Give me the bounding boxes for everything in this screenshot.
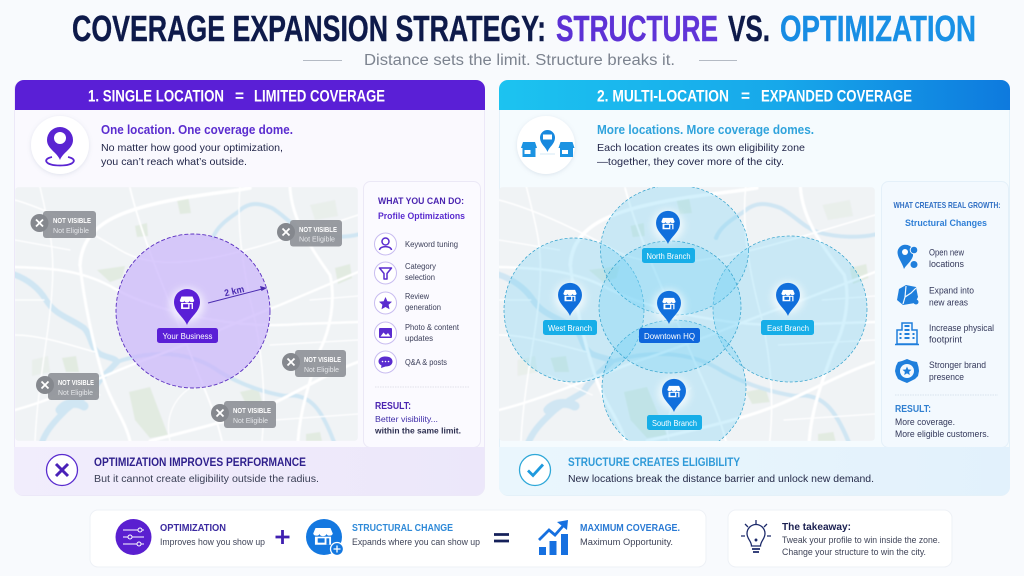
item: review generation: Review	[405, 292, 429, 301]
intro text: multi location: More locations. More coverage domes.	[597, 123, 814, 137]
badge: not visible	[282, 350, 346, 377]
badge: not visible	[277, 220, 342, 246]
intro text: single location: One location. One coverage dome.	[101, 123, 293, 137]
item: open new locations: locations	[929, 259, 964, 269]
title: STRUCTURE	[556, 8, 718, 49]
item: review generation	[374, 292, 441, 314]
item: stronger brand presence: Stronger brand	[929, 360, 986, 370]
result text: more coverage: More eligible customers.	[895, 429, 989, 439]
item: photo and content updates	[374, 322, 460, 344]
item: keyword tuning: Keyword tuning	[405, 240, 458, 249]
badge: not visible: Not Eligible	[299, 234, 335, 244]
intro text: single location: No matter how good your optimization,	[101, 142, 283, 154]
item: category selection: Category	[405, 262, 436, 271]
intro text: multi location: Each location creates its own eligibility zone	[597, 142, 805, 154]
pin: north branch: North Branch	[646, 251, 691, 261]
pin: east branch: East Branch	[767, 323, 809, 333]
dome: downtown	[599, 241, 741, 373]
takeaway box	[728, 510, 952, 567]
item: increase physical footprint: footprint	[929, 334, 962, 344]
pin: south branch: South Branch	[652, 418, 697, 428]
pin: east branch	[761, 282, 814, 335]
icon: growth chart	[539, 520, 568, 555]
callout: optimization improves performance	[14, 447, 484, 495]
intro text: single location	[101, 123, 293, 168]
sidebar: what you can do: WHAT YOU CAN DO:	[378, 196, 464, 207]
item: review generation: generation	[405, 303, 441, 312]
icon: three stores	[517, 116, 575, 174]
badge: not visible: NOT VISIBLE	[299, 225, 337, 234]
term: optimization: Improves how you show up	[160, 537, 265, 547]
intro text: multi location	[597, 123, 814, 168]
pin: north branch	[642, 210, 695, 263]
badge: not visible: Not Eligible	[304, 365, 339, 374]
callout: structure creates eligibility: STRUCTURE CREATES ELIGIBILITY	[568, 457, 740, 469]
panel: multi location	[497, 80, 1010, 496]
icon: location pin	[31, 116, 89, 174]
term: maximum coverage: MAXIMUM COVERAGE.	[580, 522, 680, 534]
map: multiple coverage domes	[497, 185, 877, 456]
sidebar: what creates real growth	[882, 182, 1008, 448]
result text: more coverage: RESULT:	[895, 404, 931, 415]
item: category selection	[374, 262, 436, 284]
term: optimization: OPTIMIZATION	[160, 522, 226, 534]
term: optimization	[160, 522, 265, 547]
result text: more coverage: More coverage.	[895, 417, 955, 427]
panel: single location	[13, 80, 485, 496]
callout: structure creates eligibility: New locations break the distance barrier and unlock new demand.	[568, 473, 874, 485]
badge: not visible: Not Eligible	[53, 226, 89, 235]
item: q and a posts	[374, 351, 447, 373]
radius arrow: 2 km: 2 km	[223, 284, 245, 299]
item: increase physical footprint: Increase physical	[929, 323, 994, 333]
plus sign	[276, 530, 290, 544]
pin: south branch	[647, 378, 702, 430]
pin: west branch: West Branch	[548, 323, 592, 333]
panel header: multi location: 2. MULTI-LOCATION	[597, 86, 729, 106]
panel header: multi location: EXPANDED COVERAGE	[761, 86, 912, 106]
subtitle: Distance sets the limit. Structure breaks it.	[364, 52, 675, 69]
title: COVERAGE EXPANSION STRATEGY:	[72, 8, 546, 49]
badge: not visible: NOT VISIBLE	[58, 378, 94, 387]
badge: not visible: NOT VISIBLE	[304, 355, 341, 364]
result text: same limit: RESULT:	[375, 401, 411, 412]
takeaway text	[782, 521, 940, 557]
result text: same limit	[374, 401, 461, 436]
item: category selection: selection	[405, 273, 435, 282]
panel header: single location: 1. SINGLE LOCATION	[88, 86, 224, 106]
term: maximum coverage	[580, 522, 680, 547]
dome: north branch	[600, 185, 748, 315]
item: stronger brand presence: presence	[929, 372, 964, 382]
item: photo and content updates: updates	[405, 334, 433, 343]
icon: sliders	[116, 519, 152, 555]
panel header: multi location: =	[741, 86, 750, 106]
result text: same limit: Better visibility...	[375, 414, 438, 424]
item: expand into new areas: Expand into	[929, 286, 974, 296]
pin: your business: Your Business	[162, 331, 212, 341]
dome: west branch	[504, 238, 644, 382]
result text: more coverage	[895, 404, 989, 439]
result text: same limit: within the same limit.	[374, 426, 461, 436]
panel header: single location: =	[235, 86, 244, 106]
term: structural change: Expands where you can show up	[352, 537, 480, 547]
term: structural change: STRUCTURAL CHANGE	[352, 522, 453, 534]
item: expand into new areas	[897, 285, 974, 308]
callout: optimization improves performance: But it cannot create eligibility outside the radius.	[94, 473, 319, 485]
item: increase physical footprint	[895, 323, 994, 344]
item: q and a posts: Q&A & posts	[405, 358, 447, 367]
icon: store with plus	[306, 519, 344, 556]
coverage dome	[116, 234, 270, 388]
intro text: multi location: —together, they cover more of the city.	[597, 156, 784, 168]
badge: not visible	[36, 373, 99, 400]
radius arrow: 2 km	[208, 284, 267, 303]
term: structural change	[352, 522, 480, 547]
item: keyword tuning	[374, 233, 458, 255]
title: VS.	[728, 8, 770, 49]
map: single coverage dome	[13, 187, 360, 442]
badge: not visible	[211, 401, 276, 428]
callout: structure creates eligibility	[499, 447, 1010, 495]
panel header: multi location	[499, 80, 1010, 110]
sidebar: what you can do	[364, 182, 480, 448]
icon: light bulb	[741, 520, 771, 552]
item: photo and content updates: Photo & content	[405, 323, 460, 332]
summary equation box	[90, 510, 706, 567]
sidebar: what creates real growth: Structural Changes	[905, 218, 987, 229]
item: open new locations: Open new	[929, 248, 964, 258]
panel header: single location	[15, 80, 485, 110]
item: expand into new areas: new areas	[929, 298, 968, 308]
badge: not visible: NOT VISIBLE	[53, 216, 91, 225]
badge: not visible	[30, 211, 96, 238]
takeaway text: Change your structure to win the city.	[782, 547, 926, 557]
callout: optimization improves performance: OPTIMIZATION IMPROVES PERFORMANCE	[94, 457, 306, 469]
item: stronger brand presence	[895, 359, 986, 383]
pin: downtown hq: Downtown HQ	[644, 331, 695, 341]
intro text: single location: you can’t reach what’s outside.	[101, 156, 247, 168]
badge: not visible: NOT VISIBLE	[233, 406, 271, 415]
dome: east branch	[713, 236, 867, 382]
takeaway text: Tweak your profile to win inside the zone.	[782, 535, 940, 545]
badge: not visible: Not Eligible	[58, 388, 93, 397]
badge: not visible: Not Eligible	[233, 416, 268, 425]
pin: downtown hq	[639, 290, 700, 343]
pin: west branch	[543, 282, 597, 335]
pin: your business	[157, 288, 218, 343]
takeaway text: The takeaway:	[782, 521, 851, 533]
panel header: single location: LIMITED COVERAGE	[254, 86, 385, 106]
equals sign	[494, 534, 509, 541]
term: maximum coverage: Maximum Opportunity.	[580, 537, 673, 547]
sidebar: what you can do: Profile Optimizations	[378, 211, 465, 222]
dome: south branch	[602, 320, 746, 441]
item: open new locations	[898, 245, 964, 269]
